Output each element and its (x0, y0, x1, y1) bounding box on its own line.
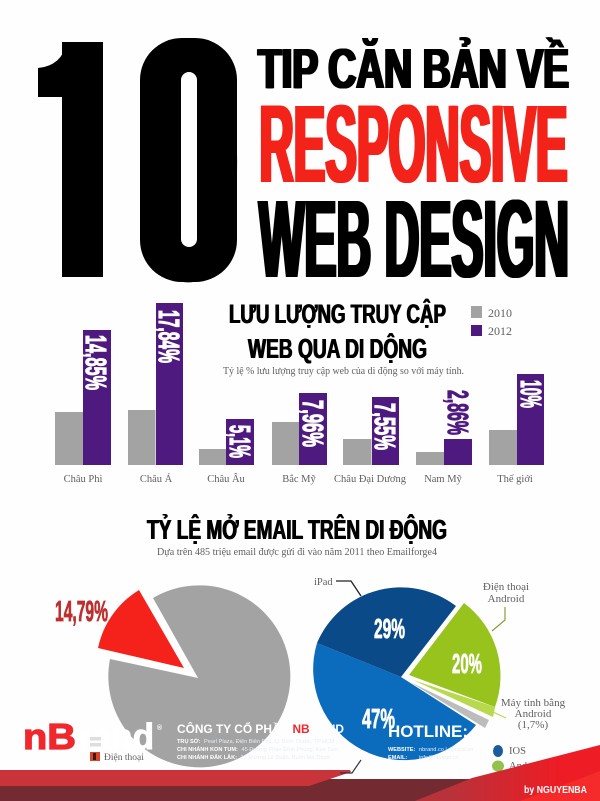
small phone label (90, 752, 144, 763)
gray pie chart (55, 585, 290, 767)
logo (23, 716, 163, 757)
legend: 2010 (488, 306, 512, 320)
icon: android (492, 760, 504, 772)
bar category labels: Bắc Mỹ (282, 474, 317, 485)
pie legend (492, 745, 545, 772)
pie callouts: (1,7%) (518, 719, 548, 731)
company name: CÔNG TY CỔ PHẦN NBRAND (177, 721, 344, 736)
slice values: 20% (452, 648, 482, 679)
company addresses (177, 738, 338, 761)
other slice (410, 682, 489, 728)
email subtitle: Dựa trên 485 triệu email được gửi đi vào năm 2011 theo Emailforge4 (157, 547, 438, 558)
logo: rand (78, 716, 154, 757)
contact details: WEBSITE: (388, 747, 415, 753)
bars 2012 (83, 303, 544, 465)
small phone label: Điện thoại (104, 753, 144, 763)
bar category labels: Châu Âu (207, 473, 246, 485)
bar values: 10% (514, 380, 546, 408)
digit 1 (38, 42, 103, 277)
bar category labels: Châu Phi (64, 474, 102, 485)
pie callouts: Máy tính bằng (501, 697, 566, 709)
bars 2010 (55, 410, 517, 465)
bar values (79, 310, 546, 458)
legend: 2012 (488, 324, 512, 338)
bar category labels: Châu Đại Dương (334, 474, 407, 485)
traffic heading: WEB QUA DI DỘNG (248, 332, 427, 364)
bar values: 5,1% (223, 425, 255, 458)
iPad slice (317, 587, 456, 677)
panel: mobile web traffic (55, 298, 546, 485)
pie callouts: Android (488, 593, 525, 605)
device pie chart (313, 587, 500, 760)
android phone slice (409, 603, 500, 707)
bar category labels (64, 473, 533, 485)
company addresses: CHI NHÁNH ĐẮK LẮK: 12 Đường Lê Duẩn, Buôn Ma Thuột (177, 753, 330, 761)
pie legend: IOS (509, 746, 526, 757)
bar values: 7,96% (296, 400, 328, 447)
red slice (98, 590, 184, 668)
bar category labels: Châu Á (140, 473, 173, 485)
bar category labels: Thế giới (497, 474, 533, 485)
contact details: EMAIL: (388, 755, 407, 761)
panel: mobile email open rate (55, 513, 566, 772)
byline: by NGUYENBA (524, 785, 587, 796)
footer band (0, 745, 600, 801)
bar category labels: Nam Mỹ (424, 474, 463, 485)
company addresses: TRỤ SỞ: Pearl Plaza, Điện Biên Phủ, Q. Bình Thạnh, TP.HCM (177, 738, 335, 745)
bar chart (55, 303, 546, 485)
slice values: 47% (362, 703, 395, 734)
android tablet slice (413, 680, 495, 717)
bar values: 17,84% (152, 310, 184, 363)
pie callouts: Điện thoại (483, 581, 529, 593)
icon: apple (493, 745, 503, 757)
legend (471, 306, 512, 338)
pie callouts: Android (515, 708, 552, 720)
pie legend: Android (509, 761, 545, 772)
bar values: 7,55% (368, 403, 400, 450)
pie callouts (314, 577, 566, 731)
logo: ® (157, 724, 163, 732)
slice values (362, 613, 482, 734)
company addresses: CHI NHÁNH KON TUM: 45 Đường Phan Đình Phùng, Kon Tum (177, 746, 338, 753)
slice values: 29% (374, 613, 405, 644)
contact details: nbrand.co | nbrand.vn (419, 747, 473, 753)
traffic heading: LƯU LƯỢNG TRUY CẬP (229, 298, 446, 329)
company info (177, 721, 473, 761)
title (38, 37, 569, 282)
logo: nB (23, 716, 76, 757)
big number 10 (38, 38, 238, 282)
traffic subtitle: Tỷ lệ % lưu lượng truy cập web của di động so với máy tính. (223, 366, 464, 377)
contact details: info@nbrand.co (419, 755, 459, 761)
email heading: TỶ LỆ MỞ EMAIL TRÊN DI ĐỘNG (147, 513, 447, 545)
bar values: 2,86% (441, 390, 473, 435)
red slice value: 14,79% (55, 596, 108, 628)
hotline: HOTLINE: (388, 722, 468, 741)
traffic heading (229, 298, 446, 364)
bar values: 14,85% (79, 335, 111, 390)
contact details (388, 747, 473, 761)
pie callouts: iPad (314, 577, 333, 588)
